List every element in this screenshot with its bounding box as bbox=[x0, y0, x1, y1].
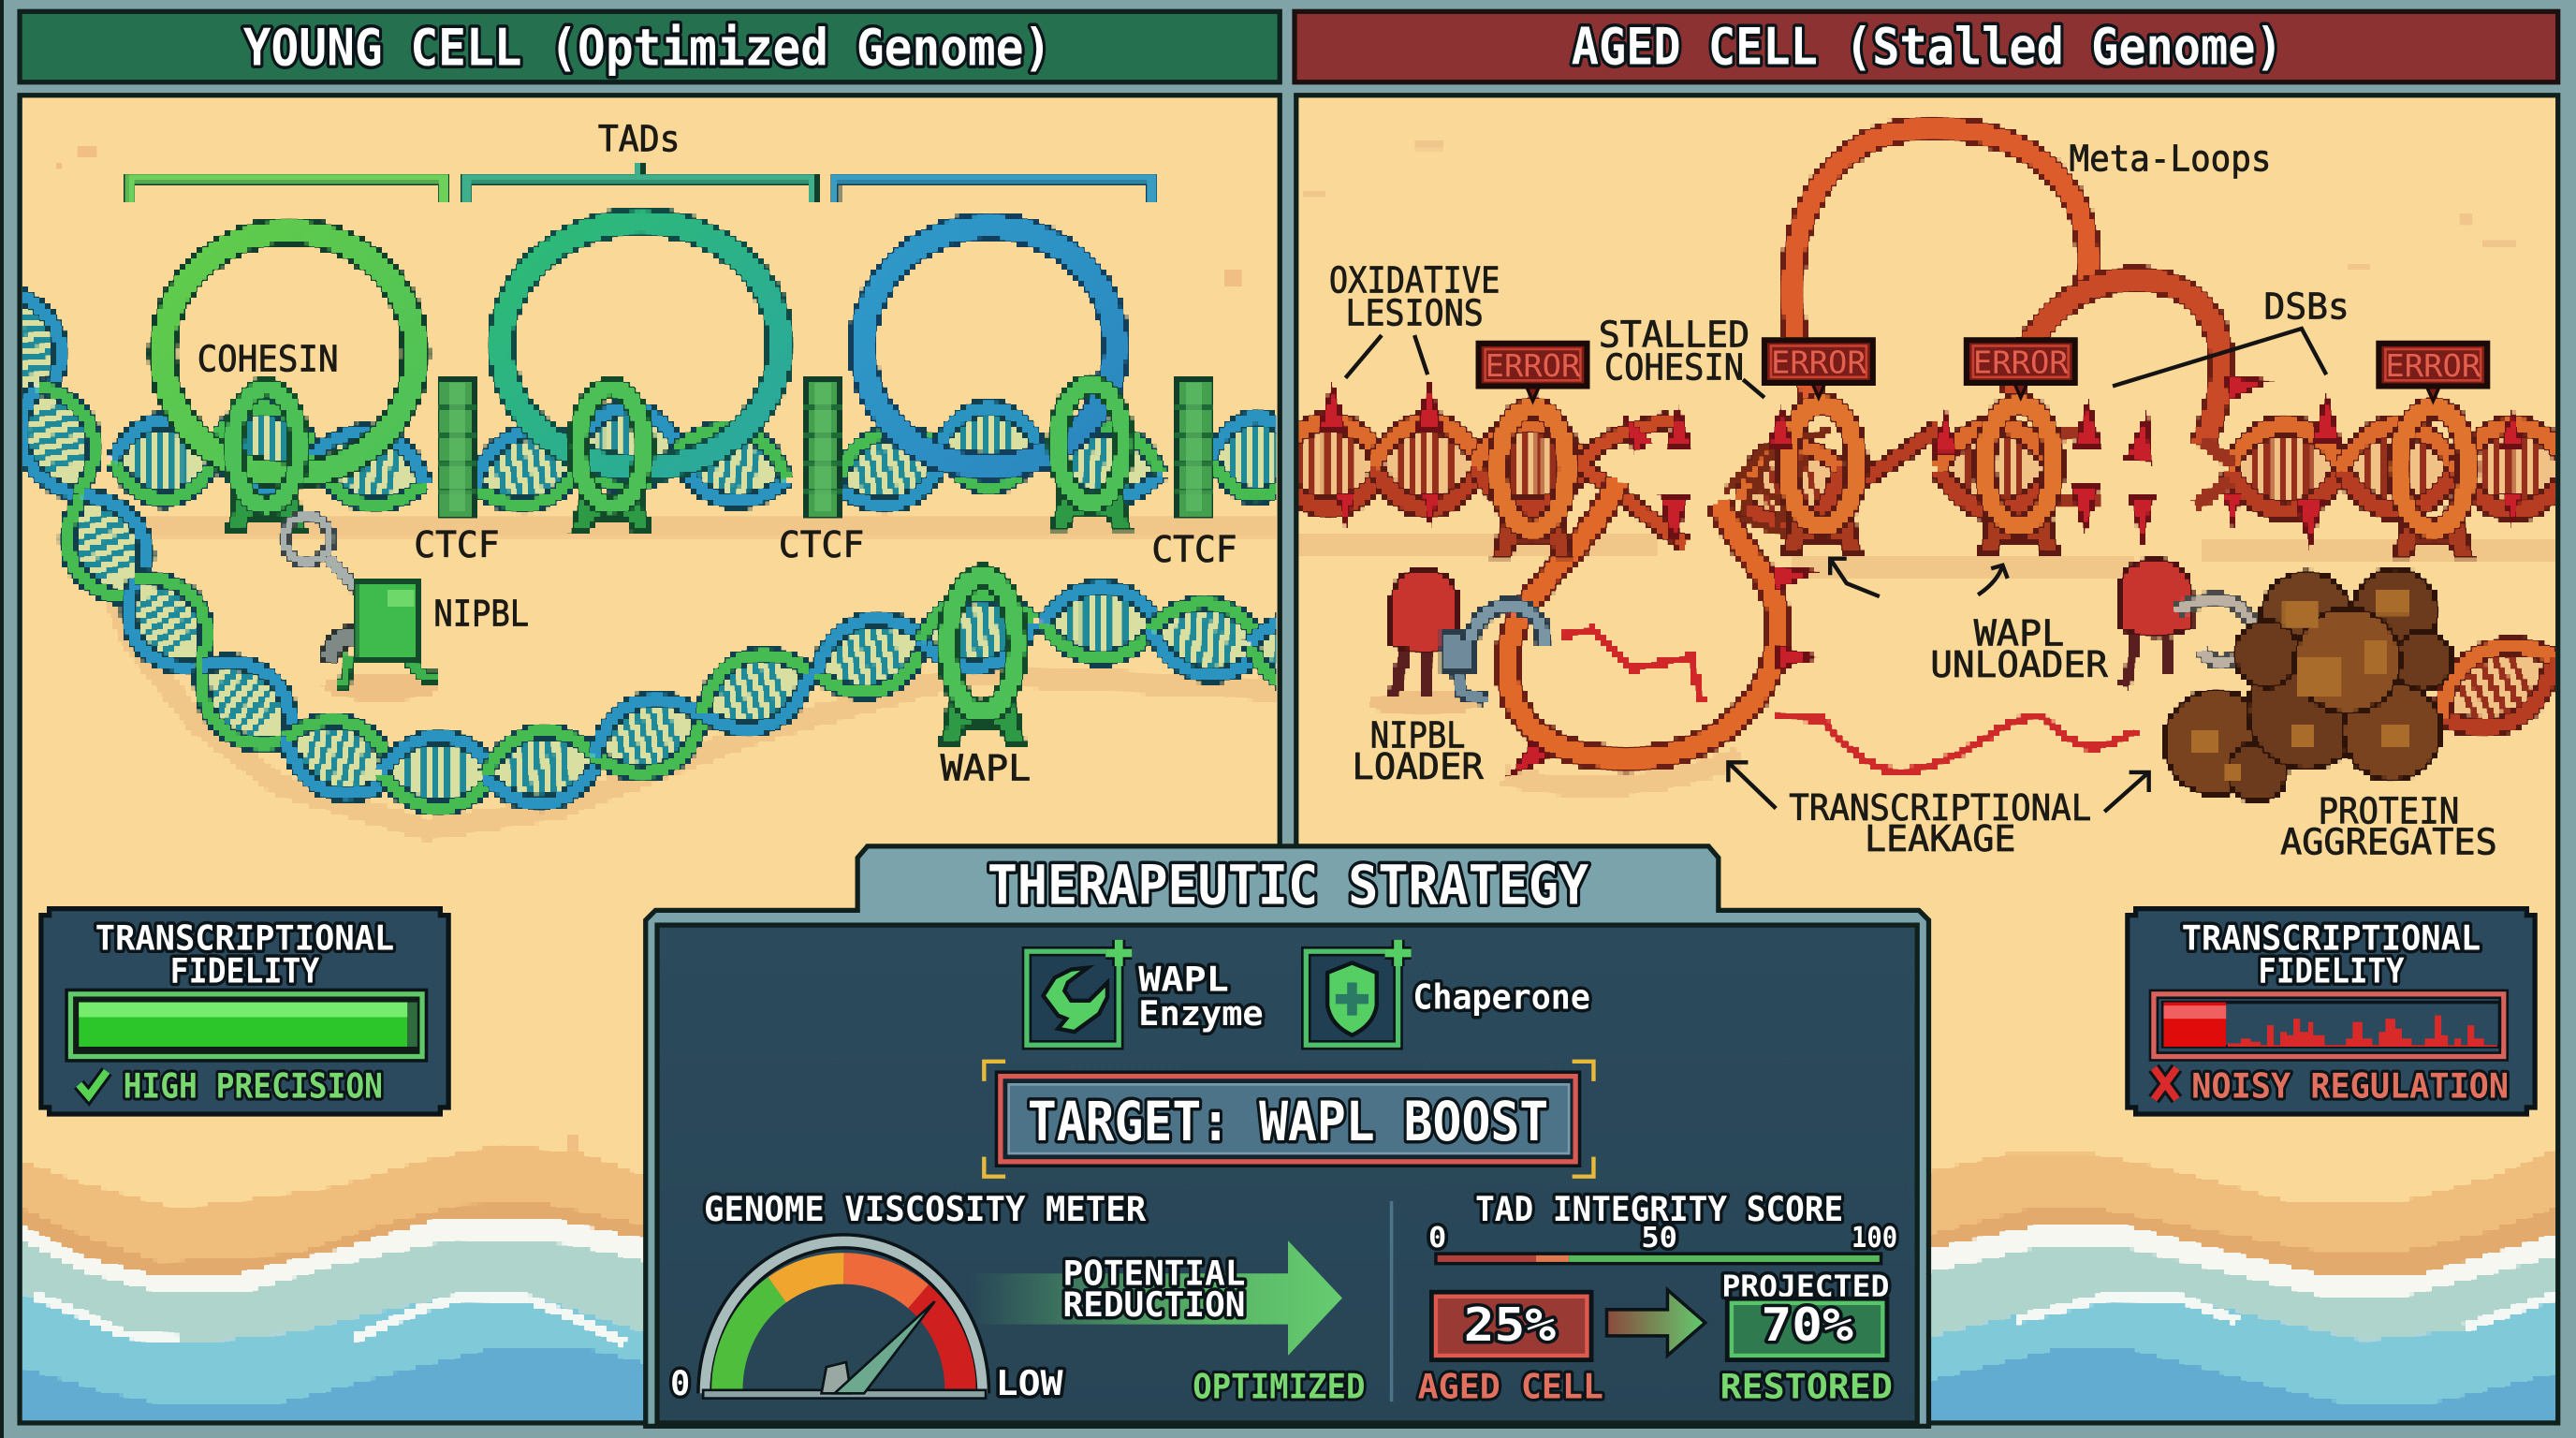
sand shadows under DNA bbox=[66, 477, 1281, 829]
fidelity heading bbox=[2182, 917, 2481, 991]
panel: young cell bbox=[0, 11, 1369, 1423]
aged score box: 25% bbox=[1464, 1298, 1557, 1352]
sand specks bbox=[56, 148, 1244, 1153]
ERROR tag 2 bbox=[1764, 340, 1873, 398]
label: restored: RESTORED bbox=[1720, 1367, 1893, 1407]
label: transcriptional leakage bbox=[1789, 787, 2091, 860]
transcriptional leakage loop bbox=[1508, 479, 1778, 759]
label: transcriptional leakage: TRANSCRIPTIONAL bbox=[1789, 787, 2091, 829]
panel body bbox=[657, 925, 1917, 1423]
fidelity bar: noisy bbox=[2154, 994, 2504, 1057]
cohesin rings bbox=[227, 385, 1131, 742]
label: chaperone: Chaperone bbox=[1412, 977, 1590, 1018]
label: CTCF 1: CTCF bbox=[414, 524, 500, 566]
beach waves: aged side bbox=[1922, 1147, 2558, 1423]
ERROR tag 3: ERROR bbox=[1973, 344, 2070, 380]
label: TADs: TADs bbox=[598, 118, 681, 160]
upper DNA helix bbox=[112, 407, 1303, 521]
heading: TAD integrity score: TAD INTEGRITY SCORE bbox=[1475, 1189, 1843, 1229]
heading: therapeutic strategy: THERAPEUTIC STRATEGY bbox=[988, 853, 1588, 917]
TAD loop 1 bbox=[163, 231, 416, 475]
aged panel border bbox=[1296, 95, 2558, 1423]
label: WAPL enzyme: Enzyme bbox=[1138, 993, 1264, 1034]
status: high precision: HIGH PRECISION bbox=[124, 1065, 383, 1106]
header: aged cell bbox=[1295, 11, 2558, 82]
label: WAPL enzyme: WAPL bbox=[1138, 959, 1229, 999]
heading: genome viscosity meter: GENOME VISCOSITY METER bbox=[704, 1189, 1147, 1229]
label: aged cell: AGED CELL bbox=[1418, 1367, 1603, 1407]
icon: NIPBL loader robot bbox=[1390, 568, 1544, 700]
meta-loop large bbox=[1792, 128, 2088, 411]
panel: therapeutic strategy bbox=[646, 846, 1928, 1426]
icon: WAPL unloader robot bbox=[2119, 559, 2252, 687]
header: aged cell: AGED CELL (Stalled Genome) bbox=[1572, 17, 2283, 76]
panel: aged transcriptional fidelity bbox=[2128, 909, 2535, 1114]
ERROR tag 2: ERROR bbox=[1771, 344, 1867, 380]
panel tab bbox=[646, 846, 1928, 1426]
restored score box bbox=[1728, 1298, 1886, 1358]
header: young cell bbox=[20, 11, 1280, 82]
arrow: score improvement bbox=[1606, 1290, 1705, 1356]
status: noisy regulation: NOISY REGULATION bbox=[2191, 1065, 2509, 1106]
aged score box bbox=[1432, 1293, 1590, 1358]
fidelity heading: FIDELITY bbox=[2258, 951, 2405, 991]
protein aggregates bbox=[2163, 568, 2452, 801]
score scale: 100 bbox=[1852, 1222, 1897, 1255]
label: NIPBL loader: LOADER bbox=[1352, 746, 1485, 788]
label: oxidative lesions: OXIDATIVE bbox=[1329, 259, 1500, 301]
CTCF barriers bbox=[439, 378, 1212, 518]
icon: chaperone shield bbox=[1306, 940, 1412, 1045]
icon: WAPL enzyme wrench bbox=[1027, 940, 1132, 1045]
target callout bbox=[984, 1062, 1593, 1177]
target callout: TARGET: WAPL BOOST bbox=[1028, 1090, 1548, 1153]
fidelity heading: TRANSCRIPTIONAL bbox=[95, 917, 394, 958]
TAD brackets bbox=[130, 163, 1151, 200]
restored score box: 70% bbox=[1761, 1298, 1853, 1352]
TAD loop 2 bbox=[501, 222, 781, 468]
label: CTCF 3: CTCF bbox=[1151, 529, 1237, 571]
label: NIPBL loader bbox=[1352, 715, 1485, 788]
label: WAPL unloader: WAPL bbox=[1974, 613, 2064, 655]
label: CTCF 2: CTCF bbox=[779, 524, 864, 566]
label: NIPBL: NIPBL bbox=[433, 594, 529, 636]
label: stalled cohesin: STALLED bbox=[1599, 314, 1749, 356]
sand specks bbox=[1301, 139, 2517, 1255]
icon: check mark bbox=[79, 1071, 107, 1096]
label: oxidative lesions: LESIONS bbox=[1345, 293, 1484, 335]
young panel border bbox=[20, 95, 1280, 1423]
panel: young transcriptional fidelity bbox=[41, 909, 448, 1114]
label: DSBs: DSBs bbox=[2264, 286, 2349, 328]
fidelity bar: high bbox=[67, 990, 426, 1060]
label: stalled cohesin: COHESIN bbox=[1604, 346, 1744, 389]
stalled helix fragments bbox=[1271, 419, 2571, 546]
aged sand background bbox=[1296, 97, 2558, 1423]
meta-loop small bbox=[2012, 279, 2269, 447]
ERROR tag 1 bbox=[1479, 344, 1587, 401]
ERROR tag 4: ERROR bbox=[2385, 347, 2481, 384]
beach waves: young side bbox=[22, 1144, 657, 1423]
label: protein aggregates bbox=[2280, 790, 2497, 864]
label: protein aggregates: PROTEIN bbox=[2318, 790, 2459, 832]
fidelity heading: TRANSCRIPTIONAL bbox=[2182, 917, 2481, 958]
gauge label: 0: 0 bbox=[670, 1363, 690, 1403]
divider bbox=[1390, 1201, 1393, 1401]
score scale bbox=[1428, 1222, 1897, 1265]
lower DNA helix bbox=[0, 285, 1369, 811]
label: COHESIN: COHESIN bbox=[198, 339, 339, 381]
ERROR tag 3 bbox=[1967, 340, 2075, 398]
score scale: 0 bbox=[1428, 1222, 1446, 1255]
icon: NIPBL loader robot bbox=[285, 516, 440, 701]
label: Meta-Loops: Meta-Loops bbox=[2070, 139, 2271, 181]
label: NIPBL loader: NIPBL bbox=[1370, 715, 1466, 757]
header: young cell: YOUNG CELL (Optimized Genome) bbox=[243, 18, 1051, 77]
oxidative lesion spikes bbox=[1319, 386, 2523, 784]
arrow: potential reduction bbox=[971, 1240, 1342, 1356]
label: optimized: OPTIMIZED bbox=[1193, 1367, 1365, 1407]
sand shadows bbox=[1298, 546, 2556, 786]
young sand background bbox=[22, 97, 1280, 1423]
pointer lines bbox=[1345, 329, 2326, 812]
label: transcriptional leakage: LEAKAGE bbox=[1865, 818, 2016, 860]
label: WAPL unloader bbox=[1930, 613, 2109, 686]
fidelity heading: FIDELITY bbox=[170, 951, 320, 991]
gauge label: LOW: LOW bbox=[996, 1363, 1063, 1403]
ERROR tag 4 bbox=[2378, 344, 2487, 401]
label: WAPL enzyme bbox=[1138, 959, 1264, 1034]
label: WAPL: WAPL bbox=[941, 748, 1031, 790]
icon: X mark bbox=[2154, 1068, 2177, 1099]
cohesin stalled bbox=[1493, 404, 2472, 557]
arrow: potential reduction: REDUCTION bbox=[1063, 1284, 1245, 1325]
arrow: potential reduction: POTENTIAL bbox=[1063, 1253, 1245, 1293]
ERROR tag 1: ERROR bbox=[1486, 347, 1581, 384]
panel: aged cell bbox=[1271, 11, 2571, 1423]
DNA entangled by aggregates bbox=[2423, 624, 2570, 750]
label: oxidative lesions bbox=[1329, 259, 1500, 335]
TAD loop 3 bbox=[862, 227, 1116, 466]
label: projected: PROJECTED bbox=[1721, 1270, 1889, 1304]
viscosity gauge bbox=[703, 1241, 986, 1399]
fidelity heading bbox=[95, 917, 394, 991]
label: protein aggregates: AGGREGATES bbox=[2280, 822, 2497, 864]
noisy RNA squiggle 2 bbox=[1776, 714, 2137, 772]
label: WAPL unloader: UNLOADER bbox=[1930, 644, 2109, 686]
noisy RNA squiggle 1 bbox=[1562, 629, 1702, 703]
score scale: 50 bbox=[1641, 1222, 1677, 1255]
label: stalled cohesin bbox=[1599, 314, 1749, 389]
